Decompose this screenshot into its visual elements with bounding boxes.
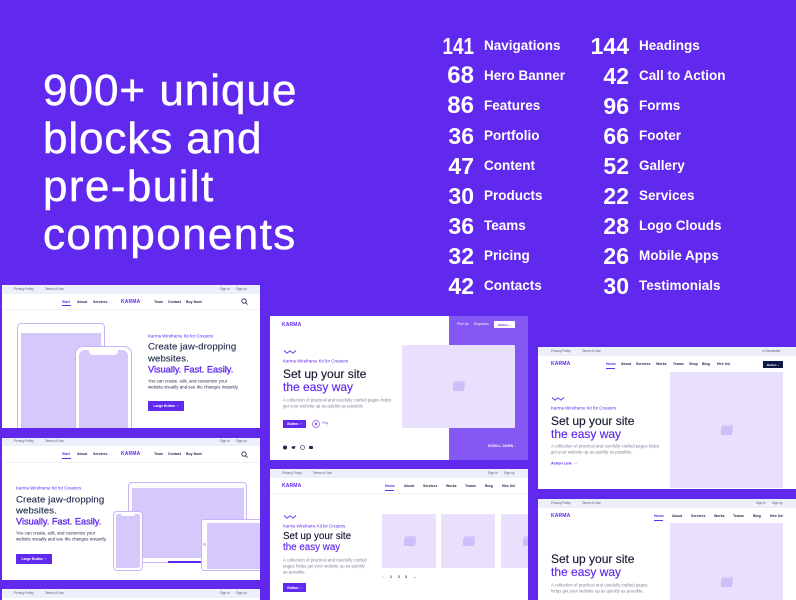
navigation: KARMA [121, 298, 140, 304]
navigation [538, 508, 796, 523]
navigation: Works [446, 484, 457, 488]
navigation: About [77, 452, 87, 456]
panel: split hero with image [270, 316, 528, 460]
eyebrow: Karma Wireframe Kit for Creators [283, 523, 345, 528]
stat: services: 22 [603, 183, 629, 209]
top bar: Privacy Policy [551, 349, 571, 353]
heading: Set up your site [551, 552, 634, 566]
top bar [270, 469, 528, 478]
stat: teams: Teams [484, 218, 526, 233]
navigation [62, 298, 248, 306]
stat: portfolio: 36 [448, 123, 474, 149]
top bar [2, 285, 260, 294]
navigation: Start [62, 452, 70, 456]
panel: tall image hero with action link [538, 347, 796, 489]
stat: content: 47 [448, 153, 474, 179]
navigation: Button › [767, 362, 779, 366]
button: Button › [287, 586, 302, 590]
navigation: Services [636, 362, 650, 366]
navigation: Services [93, 299, 107, 303]
top bar: Terms of Use [582, 349, 601, 353]
stat: content: Content [484, 158, 535, 173]
navigation [62, 451, 248, 459]
stat: forms: 96 [603, 93, 629, 119]
stat: gallery [603, 153, 685, 179]
stat: teams: 36 [448, 213, 474, 239]
stats: right column [591, 33, 726, 299]
top bar: ✉ Newsletter [762, 349, 781, 353]
image placeholder 2 [441, 514, 495, 568]
stat: headings: Headings [639, 38, 700, 53]
heading: the easy way [283, 380, 353, 394]
top bar [2, 589, 260, 598]
stat: call to action: 42 [603, 63, 629, 89]
stats: left column [443, 33, 565, 299]
paragraph: A collection of practical and carefully crafted pages [551, 582, 648, 587]
stat: logo clouds: 28 [603, 213, 629, 239]
navigation: Shop [689, 362, 698, 366]
stat: call to action: Call to Action [639, 68, 726, 83]
stat: contacts: 42 [448, 273, 474, 299]
button [148, 401, 184, 411]
stat: pricing: 32 [448, 243, 474, 269]
title: components [43, 210, 297, 259]
top bar: Terms of Use [45, 287, 64, 291]
heading: Visually. Fast. Easily. [16, 516, 101, 526]
panel: laptop hero [2, 438, 260, 580]
stat: mobile apps [603, 243, 719, 269]
navigation: Blog [753, 514, 761, 518]
paragraph: A collection of practical and carefully crafted [283, 557, 367, 562]
purple side [449, 316, 528, 460]
stat: logo clouds: Logo Clouds [639, 218, 721, 233]
device: laptop [128, 482, 247, 563]
paragraph [283, 397, 391, 408]
panel: tablet and phone hero [2, 285, 260, 428]
navigation: KARMA [282, 483, 301, 489]
top bar: Privacy Policy [14, 287, 34, 291]
panel: bottom right hero [538, 499, 796, 600]
navigation: Blog [485, 484, 493, 488]
paragraph [148, 378, 239, 390]
paragraph: pages helps get your website up as quickly [283, 563, 365, 568]
icon: wave [552, 397, 564, 401]
top bar: Sign In [220, 287, 230, 291]
pager: → [412, 574, 417, 580]
social icons [283, 445, 313, 450]
heading: the easy way [551, 565, 621, 579]
top bar: Sign up [236, 287, 247, 291]
icon: wave [284, 350, 296, 354]
stat: pricing: Pricing [484, 248, 530, 263]
button [16, 554, 52, 564]
stat: footer: 66 [603, 123, 629, 149]
top bar: Sign In [488, 471, 498, 475]
stat: navigations [443, 33, 561, 59]
panel: cropped third page [2, 589, 260, 600]
icon: play: Play [322, 421, 328, 425]
eyebrow: Karma Wireframe Kit for Creators [551, 405, 616, 410]
image placeholder [402, 345, 515, 428]
heading [551, 413, 641, 441]
navigation: Home [606, 362, 616, 366]
image placeholder [670, 372, 783, 488]
paragraph [16, 530, 107, 542]
stat: contacts [448, 273, 542, 299]
device: tablet [201, 519, 271, 571]
stat: pricing [448, 243, 530, 269]
stat: features: 86 [447, 92, 474, 119]
stat: products: 30 [448, 183, 474, 209]
pager: ← [381, 574, 386, 580]
top bar: Terms of Use [582, 501, 601, 505]
stat: teams [448, 213, 526, 239]
stat: features: Features [484, 98, 540, 113]
top bar [2, 438, 260, 446]
button [283, 583, 306, 592]
top bar: Sign up [236, 591, 247, 595]
stat: forms: Forms [639, 98, 680, 113]
navigation [551, 361, 783, 369]
stat: services [603, 183, 695, 209]
top bar: Privacy Policy [551, 501, 571, 505]
navigation: About [672, 514, 682, 518]
button: Large Button › [22, 557, 46, 561]
top bar [538, 499, 796, 508]
stat: products: Products [484, 188, 543, 203]
scroll down: SCROLL DOWN ↓ [488, 444, 516, 448]
stat: mobile apps: 26 [603, 243, 629, 269]
device: phone [75, 346, 132, 436]
heading [283, 367, 366, 394]
top bar: Sign up [772, 501, 783, 505]
heading: Set up your site [551, 414, 634, 428]
top bar: Sign up [236, 439, 247, 443]
heading: the easy way [283, 542, 340, 553]
top bar: Sign In [756, 501, 766, 505]
paragraph: You can create, edit, and customize your [148, 378, 227, 383]
pager [381, 574, 417, 580]
paragraph: website visually and see the changes instantly. [148, 384, 239, 389]
action link: Action Link → [551, 462, 578, 466]
side navigation [457, 321, 515, 328]
heading [148, 341, 236, 375]
top bar: Privacy Policy [282, 471, 302, 475]
pager: 2 [398, 574, 400, 578]
heading: the easy way [551, 427, 621, 441]
button: Large Button › [154, 404, 178, 408]
eyebrow: Karma Wireframe Kit for Creators [283, 358, 348, 363]
heading: websites. [16, 505, 57, 516]
side navigation: Plot List [457, 322, 468, 326]
stat: forms [603, 93, 680, 119]
top bar: Terms of Use [45, 439, 64, 443]
navigation: Teams [733, 514, 744, 518]
heading: Set up your site [283, 367, 366, 381]
navigation: Contact [168, 299, 181, 303]
title: pre-built [43, 162, 215, 211]
paragraph [551, 443, 663, 456]
stat: testimonials: 30 [603, 273, 629, 299]
heading [551, 551, 641, 579]
heading: Set up your site [283, 531, 351, 542]
image placeholder [670, 523, 783, 600]
title: blocks and [43, 114, 262, 163]
pager: 3 [405, 574, 407, 578]
navigation: Buy Now! [186, 299, 202, 303]
stat: headings [591, 33, 700, 59]
side navigation: Dropdown [474, 322, 489, 326]
stat: navigations: Navigations [484, 38, 561, 53]
paragraph: get your website up as quickly as possible. [283, 403, 364, 408]
stat: testimonials: Testimonials [639, 278, 721, 293]
stat: mobile apps: Mobile Apps [639, 248, 719, 263]
paragraph [551, 582, 663, 595]
navigation: KARMA [551, 513, 570, 519]
stat: hero banner: Hero Banner [484, 68, 565, 83]
device: phone [113, 511, 143, 571]
stat: content [448, 153, 535, 179]
top bar: Sign In [220, 439, 230, 443]
stat: contacts: Contacts [484, 278, 542, 293]
heading: websites. [148, 353, 189, 364]
stat: gallery: Gallery [639, 158, 685, 173]
stat: footer: Footer [639, 128, 681, 143]
top bar [538, 347, 796, 356]
paragraph: You can create, edit, and customize your [16, 530, 95, 535]
stat: navigations: 141 [443, 33, 474, 59]
stat: portfolio: Portfolio [484, 128, 540, 143]
navigation: Buy Now! [186, 452, 202, 456]
stat: footer [603, 123, 681, 149]
navigation: Hire Us! [502, 484, 515, 488]
paragraph: get your website up as quickly as possible. [551, 449, 632, 454]
paragraph: helps get your website up as quickly as possible. [551, 588, 644, 593]
navigation: Services [423, 484, 437, 488]
top bar: Privacy Policy [14, 591, 34, 595]
stat: call to action [603, 63, 726, 89]
stat: testimonials [603, 273, 721, 299]
paragraph: A collection of practical and carefully crafted pages helps [551, 443, 659, 448]
title [43, 66, 297, 259]
icon: play [312, 420, 328, 428]
paragraph: website visually and see the changes instantly. [16, 536, 107, 541]
device: tablet [17, 323, 105, 438]
logo: KARMA [282, 322, 301, 328]
stat: gallery: 52 [603, 153, 629, 179]
navigation: Services [93, 452, 107, 456]
navigation: Start [62, 299, 70, 303]
navigation: Team [154, 299, 163, 303]
paragraph: as possible. [283, 569, 306, 574]
navigation: Home [385, 484, 395, 488]
button [283, 420, 306, 428]
top bar: Terms of Use [313, 471, 332, 475]
navigation: KARMA [551, 361, 570, 367]
heading: Visually. Fast. Easily. [148, 364, 233, 374]
navigation: Hire Us! [717, 362, 730, 366]
navigation: About [621, 362, 631, 366]
side navigation: Button › [498, 322, 511, 326]
stat: hero banner: 68 [447, 62, 474, 89]
stat: features [447, 92, 540, 119]
navigation: Works [714, 514, 725, 518]
heading [283, 531, 351, 553]
navigation: Works [656, 362, 667, 366]
stat: services: Services [639, 188, 695, 203]
image placeholder 3 [501, 514, 555, 568]
paragraph [283, 557, 367, 574]
stat: portfolio [448, 123, 540, 149]
heading [16, 494, 104, 527]
eyebrow: Karma Wireframe Kit for Creators [148, 333, 213, 338]
stat: logo clouds [603, 213, 721, 239]
navigation: Blog [702, 362, 710, 366]
stat: products [448, 183, 543, 209]
icon: wave [284, 515, 296, 519]
stat: headings: 144 [591, 33, 629, 59]
eyebrow: Karma Wireframe Kit for Creators [16, 485, 81, 490]
navigation: About [404, 484, 414, 488]
top bar: Terms of Use [45, 591, 64, 595]
pager: 1 [390, 574, 392, 578]
navigation: Contact [168, 452, 181, 456]
heading: Create jaw-dropping [16, 494, 104, 505]
navigation: Teams [465, 484, 476, 488]
top bar: Sign In [220, 591, 230, 595]
navigation: KARMA [121, 451, 140, 457]
navigation: Services [691, 514, 705, 518]
panel: gallery hero [270, 469, 528, 600]
navigation: Home [654, 514, 664, 518]
top bar: Sign up [504, 471, 515, 475]
button: Button › [287, 422, 302, 426]
paragraph: A collection of practical and carefully crafted pages helps [283, 397, 391, 402]
navigation [282, 483, 516, 491]
navigation: Hire Us! [770, 514, 783, 518]
top bar: Privacy Policy [14, 439, 34, 443]
navigation: Team [154, 452, 163, 456]
stat: hero banner [447, 62, 565, 89]
navigation: About [77, 299, 87, 303]
navigation: Teams [673, 362, 684, 366]
image placeholder 1 [382, 514, 436, 568]
title: 900+ unique [43, 66, 297, 115]
heading: Create jaw-dropping [148, 341, 236, 352]
